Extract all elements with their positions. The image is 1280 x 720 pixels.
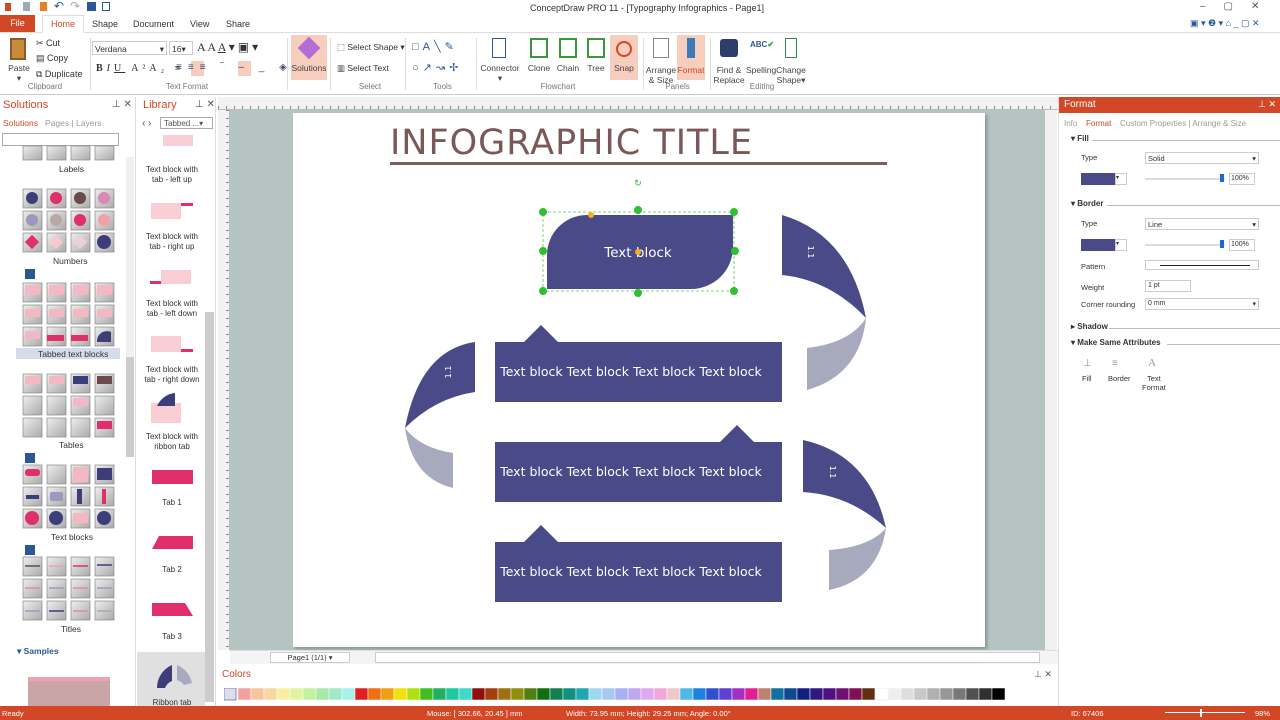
make same attributes: Format xyxy=(1142,383,1166,392)
panel: solutions: Pages | Layers xyxy=(45,118,102,128)
border section: Line xyxy=(1148,220,1162,229)
ribbon tabs: Home xyxy=(51,19,75,29)
text block 2: Text block Text block Text block Text block xyxy=(499,364,763,379)
panel: format: Custom Properties | Arrange & Size xyxy=(1120,119,1246,128)
text format group: BIU A²A₂ ≡ xyxy=(96,63,184,74)
ribbon arc right 1 xyxy=(782,215,866,390)
border section: 100% xyxy=(1231,241,1249,248)
make same attributes xyxy=(1070,338,1280,392)
flowchart group: Chain xyxy=(557,63,579,73)
text block 4 xyxy=(495,525,782,602)
text block 3: Text block Text block Text block Text block xyxy=(499,464,763,479)
ribbon tabs xyxy=(0,15,1280,33)
panel: solutions xyxy=(0,97,136,706)
text block 2 xyxy=(495,325,782,402)
solutions button: Solutions xyxy=(292,63,326,73)
page xyxy=(293,113,985,647)
format header: Format xyxy=(1064,99,1096,110)
title xyxy=(390,123,887,165)
border section: 0 mm xyxy=(1148,300,1166,307)
ribbon arc right 2 xyxy=(803,440,886,590)
title: INFOGRAPHIC TITLE xyxy=(390,123,752,163)
editing group: Find & xyxy=(717,65,741,75)
ribbon arc left: 1.1 xyxy=(444,366,453,378)
status bar: ID: 67406 xyxy=(1071,709,1104,718)
window controls: –▢✕ xyxy=(1200,1,1277,12)
make same attributes: A xyxy=(1148,357,1156,369)
border section: Corner rounding xyxy=(1081,300,1135,309)
editing group: Change xyxy=(776,65,806,75)
border section: ▾ xyxy=(1252,220,1256,229)
panels group: Arrange xyxy=(646,65,676,75)
flowchart group: Snap xyxy=(614,63,634,73)
flowchart group: Connector xyxy=(480,63,520,73)
border section: Weight xyxy=(1081,283,1104,292)
text format group: ▾ xyxy=(160,44,164,54)
select group: ▥ Select Text xyxy=(337,63,389,73)
panel: solutions: ⊥ ✕ xyxy=(112,99,132,110)
text: Text block with xyxy=(146,232,198,241)
text block 1 (selected): Text block xyxy=(603,245,672,261)
text format group: 16▾ xyxy=(172,44,186,54)
solutions button xyxy=(291,35,327,80)
page navigation bar xyxy=(230,650,1058,664)
ribbon tabs: File xyxy=(10,18,25,28)
ribbon arc right 2: 1.1 xyxy=(828,466,837,478)
panel: solutions: Text blocks xyxy=(51,532,93,542)
solutions header: Solutions xyxy=(3,99,48,111)
colors panel xyxy=(218,665,1058,706)
panel: library: ⊥ ✕ xyxy=(195,99,215,110)
make same attributes: ▾ Make Same Attributes xyxy=(1071,338,1161,347)
text: tab - right down xyxy=(144,375,200,384)
ribbon tabs: Document xyxy=(133,19,174,29)
panel: solutions: Titles xyxy=(61,624,81,634)
clipboard group: ✂ Cut xyxy=(36,38,60,48)
flowchart group: ▾ xyxy=(498,73,502,83)
tools group xyxy=(412,40,462,91)
text: Tab 1 xyxy=(162,498,182,507)
select group xyxy=(337,42,405,91)
text: tab - left down xyxy=(147,309,197,318)
tabs: Solutions xyxy=(3,118,38,128)
tools group: Tools xyxy=(433,82,452,91)
status bar: Ready xyxy=(2,709,24,718)
flowchart group: Clone xyxy=(528,63,550,73)
text format group: Text Format xyxy=(166,82,208,91)
text block 4: Text block Text block Text block Text block xyxy=(499,564,763,579)
flowchart group xyxy=(480,35,638,91)
panel: solutions: Tables xyxy=(59,440,84,450)
ribbon tabs: Shape xyxy=(92,19,118,29)
text: Text block with xyxy=(146,165,198,174)
samples section: ▾ Samples xyxy=(17,646,59,656)
flowchart group: Flowchart xyxy=(541,82,575,91)
editing group: ABC✔ xyxy=(750,40,774,49)
make same attributes: Border xyxy=(1108,374,1131,383)
format header: ⊥ ✕ xyxy=(1258,99,1276,109)
format tabs: Info xyxy=(1064,119,1077,128)
panel: library: ‹ › xyxy=(142,118,151,129)
panels group xyxy=(646,35,705,91)
icon: quick access toolbar xyxy=(5,0,110,13)
text: Ribbon tab xyxy=(153,698,191,707)
select group: Select xyxy=(359,82,381,91)
panels group: Format xyxy=(678,65,704,75)
border section: 1 pt xyxy=(1148,282,1160,289)
fill section: 100% xyxy=(1231,175,1249,182)
fill section: ▾ Fill xyxy=(1071,134,1089,143)
ribbon tabs: Share xyxy=(226,19,250,29)
make same attributes: ≡ xyxy=(1112,358,1118,369)
editing group: Editing xyxy=(750,82,774,91)
window title: ConceptDraw PRO 11 - [Typography Infographics - Page1] xyxy=(530,3,764,13)
ribbon arc left xyxy=(405,342,475,488)
colors panel: Colors xyxy=(222,669,251,680)
panel: library: Library xyxy=(143,99,177,111)
status bar: Mouse: [ 302.66, 20.45 ] mm xyxy=(427,709,522,718)
text format group: A A A ▾ ▣ ▾ xyxy=(197,40,258,54)
clipboard group: Paste xyxy=(8,63,30,73)
rulers xyxy=(218,97,1058,110)
shadow section: ▸ Shadow xyxy=(1071,322,1108,331)
select group: ⬚ Select Shape ▾ xyxy=(337,42,405,52)
fill section: ▾ xyxy=(1252,154,1256,163)
flowchart group: Tree xyxy=(587,63,605,73)
ribbon xyxy=(0,33,1280,95)
clipboard group xyxy=(8,38,82,91)
editing group: Spelling xyxy=(746,65,776,75)
panel: solutions: Labels xyxy=(59,164,84,174)
make same attributes: Text xyxy=(1147,374,1161,383)
panel: library xyxy=(137,97,216,706)
title bar xyxy=(0,0,1280,15)
editing group xyxy=(713,38,806,91)
border section: Pattern xyxy=(1081,262,1105,271)
tools group: ○↗↝✢ xyxy=(412,62,462,74)
fill section: Solid xyxy=(1148,154,1165,163)
page navigation bar: Page1 (1/1) ▾ xyxy=(287,653,333,662)
border section: ▾ xyxy=(1116,241,1119,247)
tools group: □A╲✎ xyxy=(412,41,458,53)
text block 3 xyxy=(495,425,782,502)
border section: ▾ Border xyxy=(1071,199,1103,208)
text block 1 (selected): ↻ xyxy=(634,178,642,188)
text format group xyxy=(92,40,293,91)
status bar xyxy=(0,706,1280,720)
fill section xyxy=(1070,134,1280,185)
status bar: Width: 73.95 mm; Height: 29.25 mm; Angle: 0.00° xyxy=(566,709,731,718)
text: Text block with xyxy=(146,432,198,441)
panel: solutions: Numbers xyxy=(53,256,87,266)
text format group: Verdana xyxy=(95,44,127,54)
colors panel: ⊥ ✕ xyxy=(1034,669,1052,679)
format header xyxy=(1059,97,1280,113)
clipboard group: ▾ xyxy=(17,73,21,83)
panel: library: Tabbed ...▾ xyxy=(164,119,203,128)
text: tab - left up xyxy=(152,175,192,184)
text: Text block with xyxy=(146,365,198,374)
text: Tab 3 xyxy=(162,632,182,641)
text: ribbon tab xyxy=(154,442,190,451)
panels group: & Size xyxy=(649,75,673,85)
ribbon tabs: ▣ ▾ ❷ ▾ ⌂ _ ▢ ✕ xyxy=(1190,18,1260,28)
border section xyxy=(1070,199,1280,310)
ribbon arc right 1: 1.1 xyxy=(806,246,815,258)
border section: ▾ xyxy=(1252,301,1256,308)
panels group: Panels xyxy=(665,82,690,91)
border section: Type xyxy=(1081,219,1097,228)
panel: format: Format xyxy=(1086,119,1111,128)
panel: solutions: Tabbed text blocks xyxy=(38,349,108,359)
clipboard group: Clipboard xyxy=(28,82,62,91)
editing group: Replace xyxy=(713,75,745,85)
canvas xyxy=(230,110,1045,650)
text: Tab 2 xyxy=(162,565,182,574)
thumbnails xyxy=(16,146,120,620)
fill section: Type xyxy=(1081,153,1097,162)
text format group: ≡≡≡ ‾ ‒ _ ◈ xyxy=(176,62,293,73)
clipboard group: ⧉ Duplicate xyxy=(36,69,82,79)
fill section: ▾ xyxy=(1116,175,1119,181)
ribbon tabs: View xyxy=(190,19,209,29)
panel: format xyxy=(1058,97,1280,706)
make same attributes: Fill xyxy=(1082,374,1092,383)
clipboard group: ▤ Copy xyxy=(36,53,68,63)
text: tab - right up xyxy=(150,242,194,251)
text block 1 (selected) xyxy=(539,178,739,297)
status bar: 98% xyxy=(1255,709,1270,718)
text: Text block with xyxy=(146,299,198,308)
make same attributes: ⊥ xyxy=(1083,358,1092,369)
editing group: Shape▾ xyxy=(777,75,805,85)
